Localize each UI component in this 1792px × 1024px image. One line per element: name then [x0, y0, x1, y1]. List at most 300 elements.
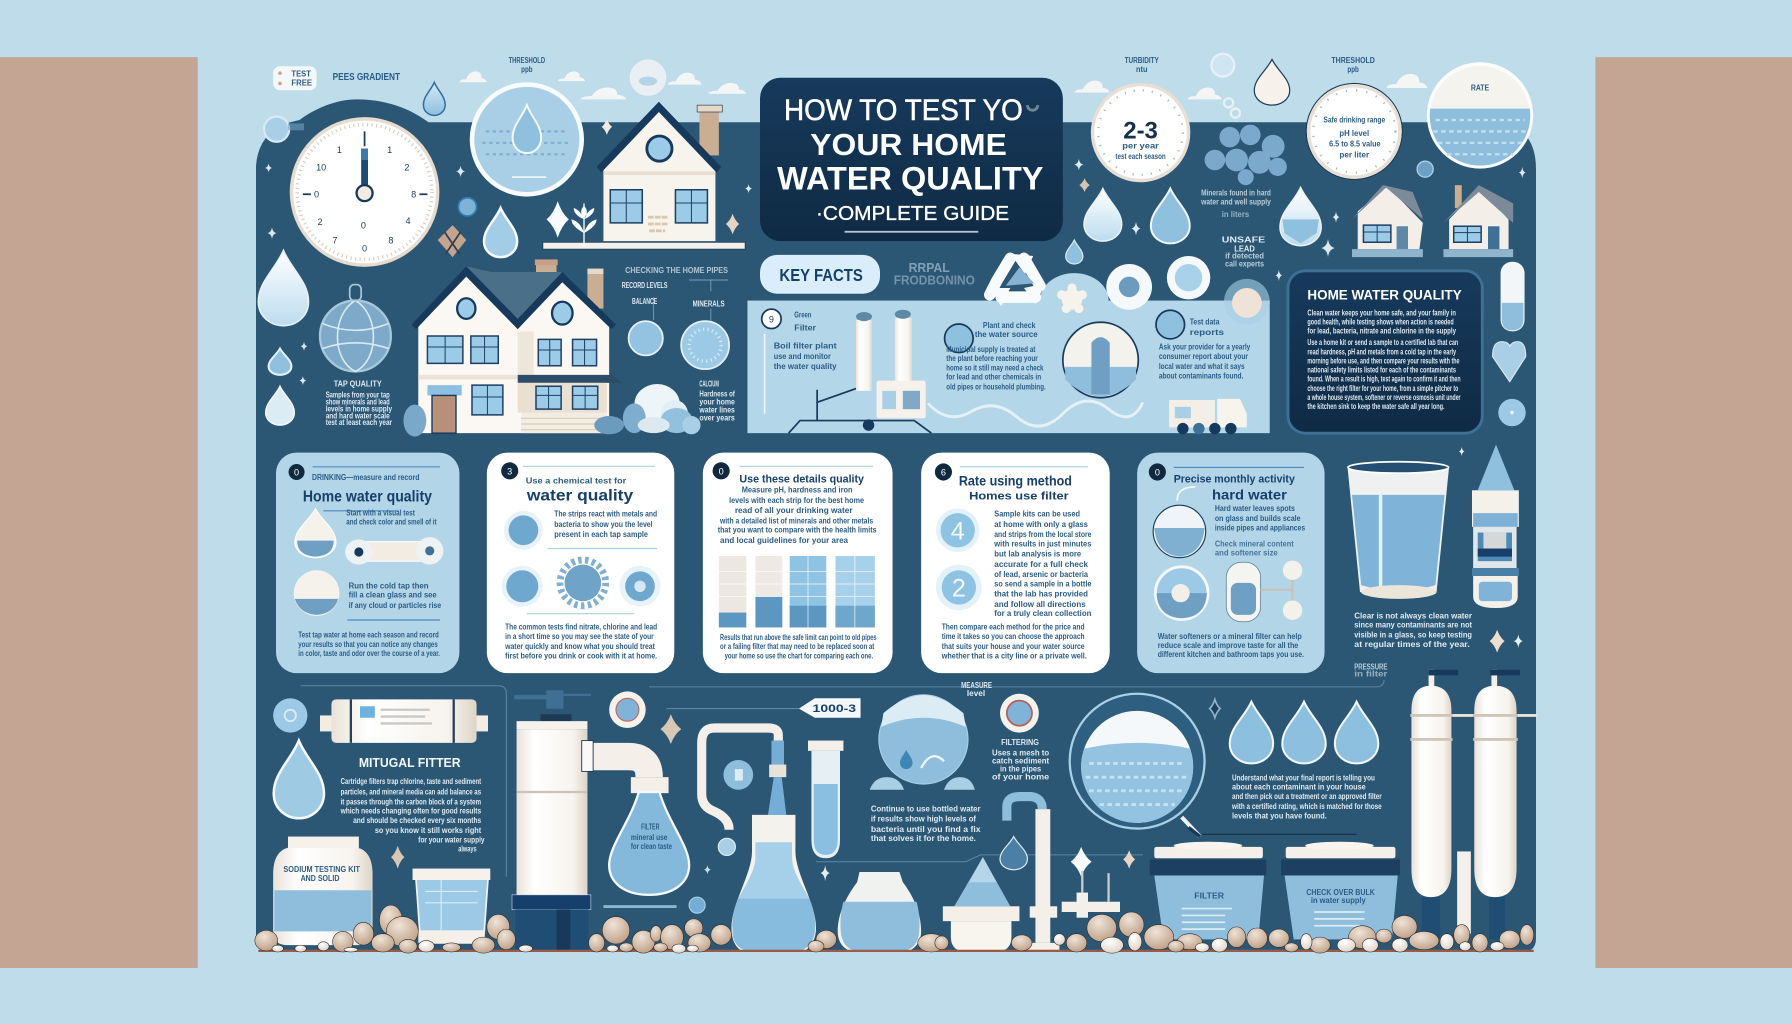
badge: 0 [1155, 467, 1160, 477]
heading [526, 476, 633, 505]
icons: small drops left [266, 349, 294, 425]
text: present in each tap sample [554, 530, 649, 539]
badge: 6 [941, 467, 946, 477]
gauge clock: 4 [405, 216, 411, 226]
text [718, 486, 877, 545]
text: caption [992, 738, 1050, 781]
text [1158, 632, 1304, 659]
magnifier [1070, 694, 1357, 837]
caption: right of drops: if detected [1225, 251, 1264, 260]
cup [413, 869, 490, 943]
text: below sphere [871, 804, 981, 843]
text: below sphere: Continue to use bottled water [871, 804, 981, 813]
gauge: 2-3: per year [1122, 142, 1159, 151]
label: tag: 1000-3 [813, 703, 856, 715]
text: mineral filter: particles, and mineral media can add balance as [341, 787, 482, 796]
main dark panel [256, 99, 1536, 952]
icon and text: column two: old pipes or household plumbing. [946, 383, 1046, 392]
card 4 [921, 453, 1110, 673]
text: levels with each strip for the best home [729, 496, 864, 505]
caption: right of drops: LEAD [1234, 244, 1255, 253]
text: left column: Boil filter plant [774, 342, 837, 351]
caption: lower left: levels in home supply [326, 404, 392, 413]
dark info panel: morning before use, and then compare your results with the [1307, 356, 1460, 365]
water sphere [870, 695, 975, 790]
sparkles upper right [265, 159, 1526, 385]
gauge: readout: per liter [1339, 151, 1369, 160]
text: but lab analysis is more [994, 550, 1082, 559]
drop flask: FILTER [641, 823, 660, 832]
text [1215, 504, 1306, 557]
water circle [1429, 64, 1531, 167]
icon and text: column two: Plant and check [983, 321, 1036, 330]
labels top right: THRESHOLD [1331, 56, 1375, 65]
house upper [543, 102, 745, 249]
caption: lower left: Samples from your tap [326, 391, 390, 400]
pump filter [512, 690, 591, 952]
text: below drops: and then pick out a treatment or an approved filter [1232, 792, 1382, 801]
tall tanks [1410, 670, 1537, 939]
gauge: 2-3: test each season [1115, 152, 1166, 161]
heading: Precise monthly activity [1174, 473, 1295, 485]
text: different kitchen and bathroom taps you use. [1158, 650, 1304, 659]
badge: top left [273, 66, 317, 90]
text: mineral filter: it passes through the carbon block of a system [341, 798, 481, 807]
text: Measure pH, hardness and iron [742, 486, 853, 495]
icon: small drop [1000, 837, 1027, 870]
icon: white drop left [258, 250, 309, 326]
heading [303, 473, 432, 506]
bucket right: CHECK OVER BULK [1306, 888, 1375, 897]
icon: numbered circle: 9 [769, 314, 774, 324]
text: caption: in the pipes [1000, 764, 1042, 773]
icon: filtration plant [789, 310, 931, 433]
badge: top left: TEST [291, 70, 311, 79]
icon: circle [1155, 567, 1208, 619]
labels top right: TURBIDITY [1125, 56, 1159, 65]
big water circle [472, 85, 582, 194]
card 2 [487, 453, 674, 673]
icon: diamond [391, 846, 404, 869]
label: top drop [509, 56, 545, 74]
small caption [1354, 663, 1388, 679]
icon: drop [295, 509, 336, 558]
flask [731, 815, 816, 952]
bubbles top [1211, 54, 1240, 118]
text: reduce scale and improve taste for all the [1158, 641, 1299, 650]
icon and text: column two: the plant before reaching your [946, 354, 1038, 363]
dark info panel: national safety limits listed for each of the contaminants [1307, 366, 1456, 375]
caption: lower left: TAP QUALITY [334, 379, 382, 388]
icon and text: column three: Test data [1190, 318, 1220, 327]
caption: small: MEASURE [961, 681, 993, 690]
caption: lower left: and hard water scale [326, 411, 390, 420]
house large [411, 259, 623, 433]
tap handles [1429, 670, 1520, 675]
jar: SODIUM TESTING KIT [283, 865, 360, 874]
filter cartridge [320, 699, 488, 743]
jar: AND SOLID [301, 874, 340, 883]
circle icon right [1498, 399, 1526, 426]
drops trio [1230, 702, 1378, 763]
heading: hard water [1212, 487, 1288, 502]
icon and text: column two [945, 321, 1046, 392]
caption: mineral cluster: Minerals found in hard [1201, 188, 1271, 197]
text: your home so use the chart for comparing each one. [725, 651, 873, 660]
icon: circle pair and virus [502, 560, 661, 607]
side panel left [0, 57, 198, 968]
text: caption: catch sediment [992, 756, 1049, 765]
bucket right: in water supply [1311, 896, 1366, 905]
icon: circle 2 [936, 565, 982, 610]
caption: right of house: over years [699, 414, 735, 423]
icon: circle [723, 760, 753, 790]
sparkles: right [1459, 447, 1523, 653]
text [349, 582, 442, 610]
text: whether that is a city line or a private well. [941, 651, 1087, 660]
icon: circle 4: 4 [951, 517, 965, 545]
bucket left: FILTER [1194, 891, 1224, 900]
hexagon mineral cluster [1205, 125, 1287, 185]
text: if any cloud or particles rise [349, 601, 442, 610]
bottle [1472, 445, 1519, 608]
caption: right of house: Hardness of [699, 390, 735, 399]
icon: small drop top [423, 82, 445, 115]
key facts pill [760, 255, 880, 294]
icon: drop [484, 208, 517, 257]
icon and text: column three: reports [1190, 328, 1225, 337]
caption: right of house: CALCIUM [699, 379, 719, 388]
gauge clock: 8 [411, 190, 416, 200]
gauge: 2-3: 2-3 [1123, 117, 1158, 144]
bushes [403, 384, 701, 437]
drop flask: mineral use [631, 833, 668, 842]
bar chart [719, 555, 875, 627]
bucket right [1281, 842, 1400, 939]
badge [713, 462, 730, 479]
icon: truck [1169, 399, 1247, 434]
small caption: in filter [1354, 670, 1387, 679]
icon and text: column two: Municipal supply is treated at [946, 345, 1036, 354]
labels and balls right of house: RECORD LEVELS [622, 281, 668, 290]
icon: circle [504, 511, 543, 550]
water circle: RATE [1471, 83, 1490, 92]
text: left column [774, 342, 837, 371]
text: Water softeners or a mineral filter can help [1158, 632, 1302, 641]
text: Results that run above the safe limit can point to old pipes [720, 633, 877, 642]
text: below glass: at regular times of the year. [1354, 640, 1470, 649]
text: bacteria to show you the level [554, 520, 653, 529]
icon: ring circle [273, 698, 307, 733]
heading [959, 474, 1072, 502]
text: below sphere: that solves it for the home. [871, 834, 976, 843]
icon and text: column three: local water and what it says [1159, 362, 1245, 371]
icon: circle 4 [936, 509, 979, 552]
icon: circle 2: 2 [952, 575, 966, 603]
ring icon [1106, 264, 1152, 310]
text: mineral filter: always [458, 844, 477, 853]
heart icon [1493, 342, 1526, 382]
card 1: and check color and smell of it [346, 518, 437, 527]
curved white pipe [702, 728, 778, 830]
text: Check mineral content [1215, 539, 1294, 548]
caption: mineral cluster [1200, 188, 1271, 219]
text: accurate for a full check [994, 560, 1089, 569]
clouds right [1074, 74, 1427, 99]
caption: small [961, 681, 993, 698]
drop flask: for clean taste [631, 842, 672, 851]
gauge: readout: pH level [1339, 129, 1369, 138]
label: beside key facts: FRODBONINO [894, 274, 975, 288]
badge [289, 464, 305, 480]
title box: ·COMPLETE GUIDE [816, 203, 1009, 225]
sparkles: center [1071, 847, 1135, 877]
test tube [808, 741, 843, 858]
heading: DRINKING—measure and record [312, 473, 420, 482]
text [504, 623, 657, 660]
labels top right [1125, 56, 1375, 74]
text: with results in just minutes [993, 539, 1092, 548]
text [554, 510, 657, 539]
vase [838, 872, 921, 952]
gauge clock [291, 119, 438, 265]
text: Sample kits can be used [994, 510, 1080, 519]
text [720, 633, 877, 660]
caption: right of house: your home [699, 398, 735, 407]
card 1 [276, 453, 459, 673]
side panel right [1595, 57, 1792, 968]
bubble [1417, 161, 1433, 177]
text: for a truly clean collection [994, 609, 1092, 618]
icon: brown shield [438, 225, 466, 257]
ornament circle [609, 691, 646, 728]
gauge clock: 8 [388, 235, 393, 245]
bucket left [1150, 842, 1266, 939]
cone bowl [943, 857, 1019, 952]
gauge clock: 7 [332, 235, 337, 245]
dark info panel: choose the right filter for your home, from a simple pitcher to [1307, 384, 1458, 393]
dark info panel: found. When a result is high, test again to confirm it and then [1307, 375, 1461, 384]
text: Start with a visual test [346, 508, 415, 517]
clouds left [459, 71, 746, 99]
gauge: readout: 6.5 to 8.5 value [1329, 139, 1381, 148]
text: inside pipes and appliances [1215, 523, 1306, 532]
text: below glass [1354, 611, 1472, 649]
faucet [1007, 797, 1059, 952]
text: and local guidelines for your area [720, 536, 849, 545]
text: mineral filter: Cartridge filters trap chlorine, taste and sediment [341, 777, 481, 786]
small bubble and sparkles [603, 838, 830, 913]
icon and text: column three: consumer report about your [1159, 352, 1248, 361]
title box: YOUR HOME [810, 127, 1007, 162]
dark info panel: Clean water keeps your home safe, and your family in [1307, 308, 1456, 317]
text: that you want to compare with the health limits [718, 526, 877, 535]
icon: globe [320, 285, 391, 371]
text [941, 623, 1087, 660]
text: Run the cold tap then [349, 582, 429, 591]
badge: 0 [294, 467, 299, 477]
text: below drops: levels that you have found. [1232, 811, 1327, 820]
heading: water quality [526, 488, 633, 505]
text: The strips react with metals and [554, 510, 657, 519]
ornament circle with red ring [1000, 694, 1039, 733]
text: and softener size [1215, 548, 1278, 557]
text: Hard water leaves spots [1215, 504, 1295, 513]
gauge clock: 1 [387, 145, 392, 155]
icon and text: column three: about contaminants found. [1159, 371, 1243, 380]
text: below drops: about each contaminant in your house [1232, 783, 1366, 792]
rocks [255, 905, 1534, 953]
icon: numbered circle: Green [794, 311, 812, 320]
label: beside key facts [894, 261, 975, 288]
labels and balls right of house: CHECKING THE HOME PIPES [625, 266, 729, 275]
text: on glass and builds scale [1215, 514, 1301, 523]
water stream [768, 741, 786, 815]
icon and text: column two: for lead and other chemicals in [946, 372, 1041, 381]
text: in color, taste and odor over the course of a year. [298, 649, 440, 658]
text: of lead, arsenic or bacteria [994, 570, 1089, 579]
icon: water tower circle [1063, 322, 1138, 398]
water glass [1347, 462, 1449, 599]
icon: numbered circle: Filter [794, 323, 816, 332]
gauge clock: 0 [361, 221, 366, 231]
icon: small bubble [458, 198, 477, 216]
caption: right of drops: UNSAFE [1222, 235, 1266, 244]
dark info panel: the kitchen sink to keep the water safe all year long. [1307, 402, 1445, 411]
text: at home with only a glass [994, 520, 1089, 529]
badge: top left: FREE [291, 79, 313, 88]
icon and text: column two: the water source [975, 330, 1038, 339]
text: mineral filter: so you know it still works right [375, 826, 481, 835]
label: tag [799, 698, 861, 718]
icon: circle [294, 570, 339, 616]
heading: Use these details quality [739, 473, 865, 485]
label: beside key facts: RRPAL [909, 261, 950, 275]
caption: right of house [699, 379, 735, 423]
text: below drops: with a certified rating, which is matched for those [1231, 802, 1382, 811]
labels and balls right of house: BALANCE [632, 297, 658, 306]
badge [1149, 463, 1166, 481]
labels and balls right of house: MINERALS [693, 299, 725, 308]
tube right [1501, 262, 1525, 331]
text: caption: of your home [992, 772, 1050, 781]
dark info panel: for lead, bacteria, nitrate and chlorine in the supply [1307, 327, 1456, 336]
ball: top [630, 59, 666, 96]
connector lines [301, 680, 1384, 877]
text: read of all your drinking water [735, 506, 853, 515]
gauge: readout: Safe drinking range [1323, 115, 1386, 124]
dark info panel: HOME WATER QUALITY [1307, 287, 1462, 302]
valve [1062, 871, 1120, 918]
flower icon on hump [1057, 283, 1087, 313]
caption: right of house: water lines [699, 406, 735, 415]
icon: recycle [990, 254, 1046, 306]
small dark diamond [1210, 699, 1220, 718]
text: below glass: Clear is not always clean water [1354, 611, 1472, 620]
heading: Use a chemical test for [526, 476, 626, 485]
badge: 0 [719, 466, 724, 476]
wave lines [928, 401, 1143, 426]
heading: Home water quality [303, 489, 432, 506]
jar [273, 837, 373, 945]
caption: mineral cluster: water and well supply [1200, 198, 1271, 207]
caption: small: level [967, 689, 985, 698]
text: Then compare each method for the price and [942, 623, 1085, 632]
text: mineral filter [340, 777, 485, 853]
icon: diamond [660, 714, 681, 744]
white dotted circle [1167, 256, 1210, 299]
text: and strips from the local store [994, 530, 1092, 539]
text: so send a sample in a bottle [994, 579, 1092, 588]
heading [1174, 473, 1295, 502]
icon: sparkle and leaf [547, 201, 597, 247]
small caption: PRESSURE [1354, 663, 1388, 672]
card 3 [703, 453, 893, 673]
text: The common tests find nitrate, chlorine and lead [505, 623, 657, 632]
icon: numbered circle [762, 309, 816, 332]
label: top drop: THRESHOLD [509, 56, 545, 65]
icon and text: column three: Ask your provider for a yearly [1159, 343, 1251, 352]
title box: HOW TO TEST YO [784, 94, 1023, 127]
gauge clock: 1 [337, 145, 342, 155]
heading: mineral filter: MITUGAL FITTER [359, 756, 461, 770]
text: in a short time so you may see the state of your [505, 632, 654, 641]
text: mineral filter: for your water supply [418, 835, 485, 844]
text: your results so that you can notice any changes [298, 640, 438, 649]
text: Test tap water at home each season and record [298, 631, 439, 640]
text: caption: FILTERING [1001, 738, 1039, 747]
text: below sphere: bacteria until you find a fix [871, 825, 981, 834]
icon and text: column three [1156, 310, 1251, 380]
white drop [1254, 59, 1290, 105]
labels and balls right of house [622, 266, 729, 369]
card 5 [1137, 453, 1325, 673]
text: mineral filter: and should be checked every six months [353, 816, 482, 825]
gauge: readout [1306, 83, 1402, 179]
text: below glass: visible in a glass, so keep testing [1354, 631, 1472, 640]
dark info panel: Use a home kit or send a sample to a certified lab that can [1307, 338, 1458, 347]
text: that the lab has provided [994, 590, 1088, 599]
gauge clock: 0 [362, 243, 367, 253]
heading: Rate using method [959, 474, 1072, 489]
text [993, 510, 1092, 618]
dark info panel: good health, while testing shows when action is needed [1307, 318, 1454, 327]
gauge clock: 0 [314, 190, 319, 200]
title box: WATER QUALITY [777, 161, 1043, 197]
caption: lower left [326, 379, 392, 427]
gauge clock: 2 [404, 162, 409, 172]
icon: diamonds [602, 119, 739, 234]
text: below sphere: if results show high levels of [871, 815, 976, 824]
icon: tube and bulbs [1226, 561, 1302, 622]
text: time it takes so you can choose the approach [942, 632, 1085, 641]
gauge: 2-3 [1093, 85, 1189, 181]
text: with a detailed list of minerals and other metals [719, 516, 874, 525]
caption: right of drops: call experts [1225, 259, 1264, 268]
icon: filter [345, 537, 443, 565]
text: left column: the water quality [774, 362, 837, 371]
gauge clock: 10 [316, 162, 326, 172]
text: first before you drink or cook with it at home. [505, 651, 657, 660]
labels top right: ppb [1347, 65, 1359, 74]
small house right [1443, 185, 1513, 257]
badge: 3 [507, 466, 512, 476]
text: that suits your house and your water source [942, 642, 1085, 651]
caption: mineral cluster: in liters [1222, 210, 1250, 219]
label: top drop: ppb [521, 65, 533, 74]
text [298, 631, 440, 658]
caption: right of drops [1222, 235, 1266, 268]
